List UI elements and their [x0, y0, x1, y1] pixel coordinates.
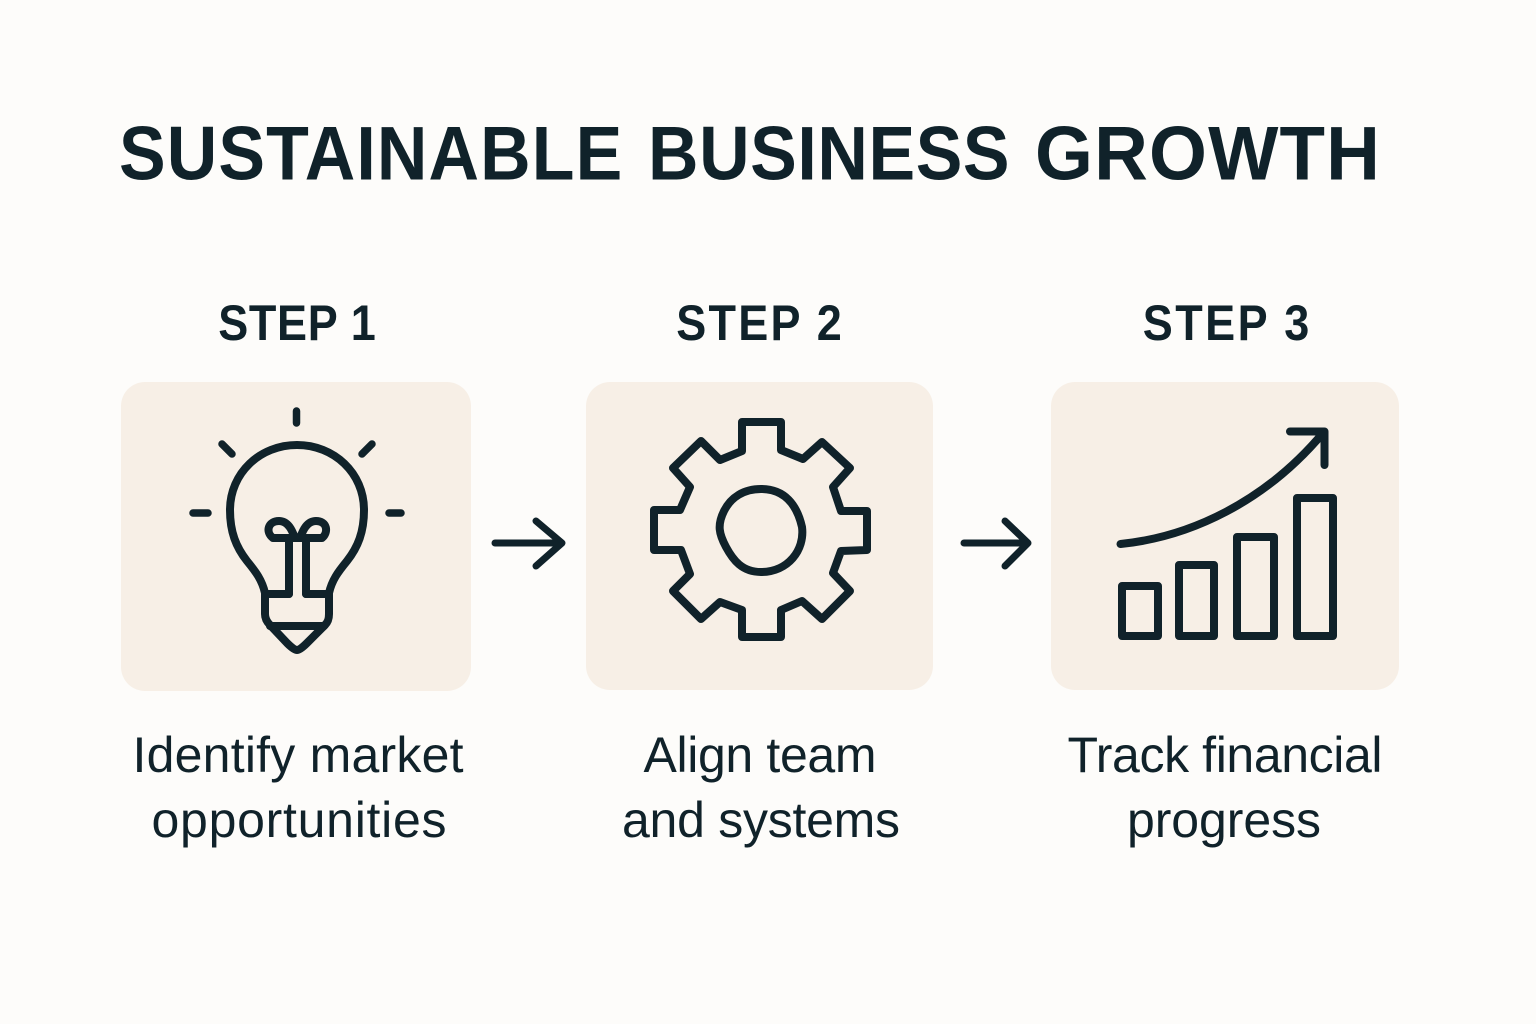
panel: step 2: and systems [622, 792, 900, 848]
step 2 card [586, 382, 933, 690]
title: GROWTH [1035, 111, 1380, 196]
panel: step 3 [1051, 296, 1399, 848]
title [119, 111, 1380, 196]
step 1 description: Identify market [132, 727, 464, 783]
icon: bar chart with rising arrow [1120, 432, 1333, 636]
step 2 description: Align team [644, 727, 876, 783]
step 2 heading: STEP 2 [676, 296, 842, 352]
step 3 heading: STEP 3 [1143, 296, 1309, 352]
arrow: step 2 to step 3 [964, 521, 1028, 566]
step 1 card [121, 382, 471, 691]
title: SUSTAINABLE [119, 112, 622, 196]
step 3 card [1051, 382, 1399, 690]
arrow: step 1 to step 2 [495, 521, 562, 566]
step 3 description: Track financial [1068, 727, 1382, 783]
step 1 heading: STEP 1 [218, 296, 376, 352]
icon: gear [654, 422, 867, 637]
title: BUSINESS [648, 112, 1010, 196]
panel: step 1 [121, 296, 471, 848]
icon: light bulb [193, 411, 401, 650]
panel: step 1: opportunities [152, 792, 446, 848]
panel: step 3: progress [1127, 792, 1321, 848]
panel: step 2 [586, 296, 933, 848]
